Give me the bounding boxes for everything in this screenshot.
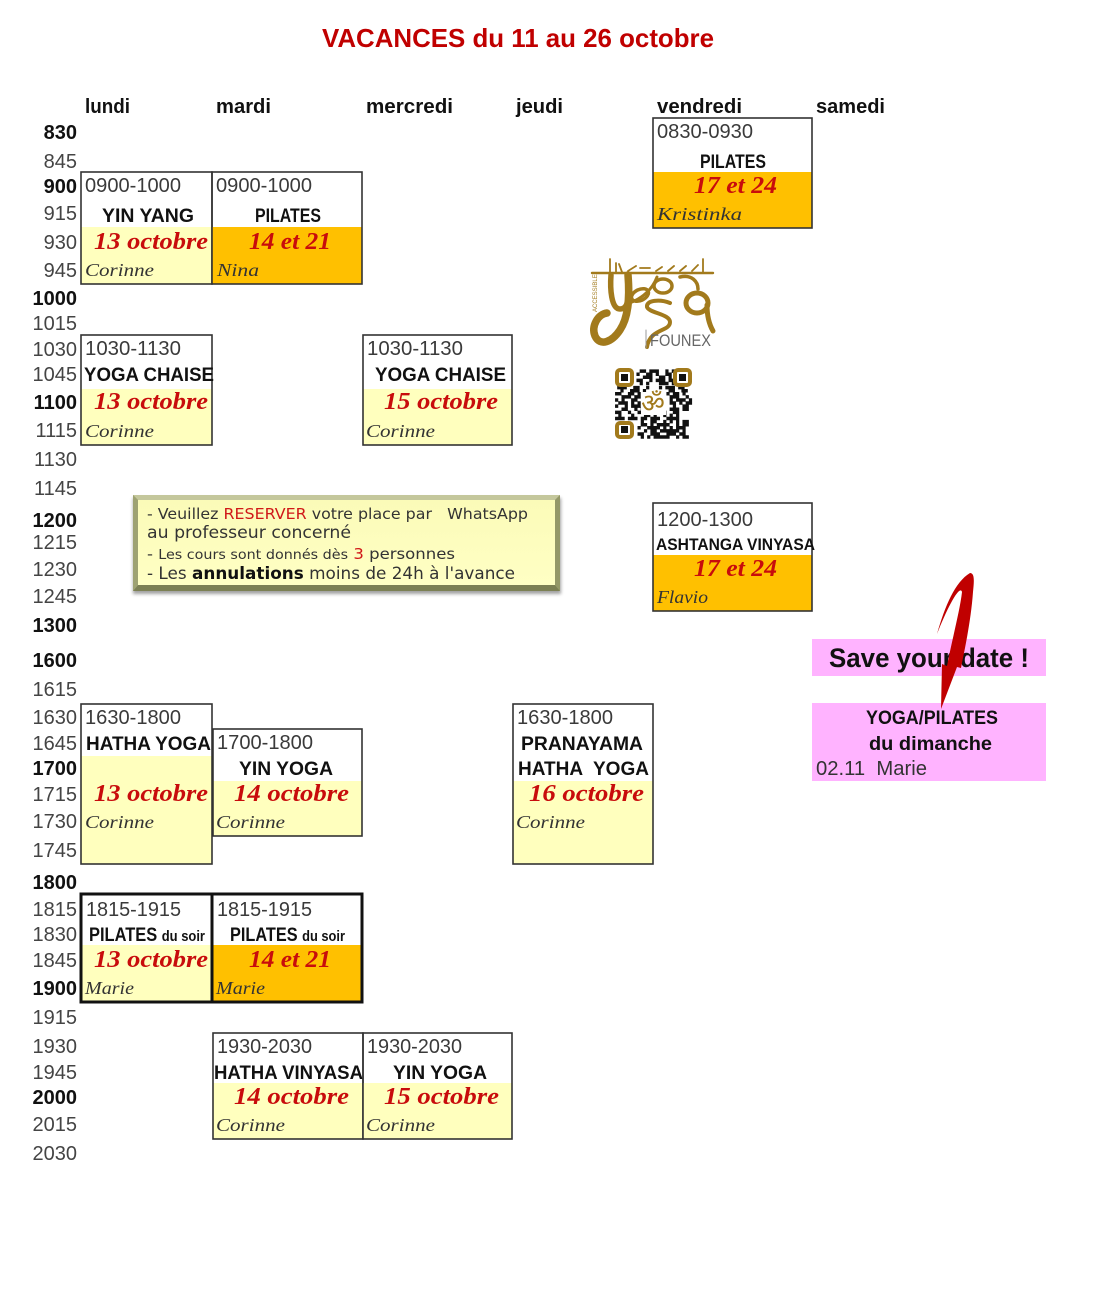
time axis: 845 bbox=[44, 151, 77, 173]
time axis: 1245 bbox=[32, 586, 77, 608]
class: lundi yoga chaise 1030: 1030-1130 bbox=[85, 338, 181, 360]
day headers bbox=[85, 96, 885, 118]
class: mardi pilates 0900: 14 et 21 bbox=[249, 229, 331, 255]
class: lundi pilates du soir 1815: 1815-1915 bbox=[86, 899, 181, 921]
day headers: jeudi bbox=[515, 96, 563, 118]
time axis: 1900 bbox=[32, 978, 77, 1000]
panel: yoga pilates du dimanche bbox=[812, 703, 1046, 781]
class: mardi hatha vinyasa 1930: HATHA VINYASA bbox=[214, 1063, 363, 1084]
time axis: 1015 bbox=[32, 313, 77, 335]
time axis: 1800 bbox=[32, 872, 77, 894]
class: lundi pilates du soir 1815: 13 octobre bbox=[94, 947, 208, 973]
class: mardi hatha vinyasa 1930 bbox=[213, 1033, 363, 1139]
class: vendredi pilates 0830: 0830-0930 bbox=[657, 121, 753, 143]
time axis: 1615 bbox=[32, 679, 77, 701]
time axis: 1630 bbox=[32, 707, 77, 729]
title: VACANCES du 11 au 26 octobre bbox=[322, 23, 714, 53]
time axis: 1145 bbox=[34, 478, 77, 500]
icon: QR code: ॐ bbox=[641, 388, 665, 418]
time axis: 1745 bbox=[32, 840, 77, 862]
callout: reservation notice: au professeur concerné bbox=[147, 523, 351, 543]
class: vendredi pilates 0830: 17 et 24 bbox=[694, 173, 777, 199]
time axis: 1600 bbox=[32, 650, 77, 672]
class: lundi yoga chaise 1030: 13 octobre bbox=[94, 389, 208, 415]
time axis: 1300 bbox=[32, 615, 77, 637]
class: mardi hatha vinyasa 1930: 1930-2030 bbox=[217, 1036, 312, 1058]
class: lundi pilates du soir 1815: Marie bbox=[84, 978, 134, 998]
class: mardi pilates 0900 bbox=[212, 172, 362, 284]
panel: save your date: Save your date ! bbox=[829, 643, 1029, 673]
callout: reservation notice: - Les annulations moins de 24h à l'avance bbox=[147, 564, 515, 583]
class: mardi pilates 0900: 0900-1000 bbox=[216, 175, 312, 197]
class: mardi yin yoga 1700: Corinne bbox=[216, 812, 285, 832]
time axis: 1830 bbox=[32, 924, 77, 946]
class: mardi pilates du soir 1815: PILATES du soir bbox=[230, 925, 345, 946]
time axis: 1815 bbox=[32, 899, 77, 921]
class: vendredi ashtanga vinyasa 1200 bbox=[653, 503, 815, 611]
class: vendredi ashtanga vinyasa 1200: Flavio bbox=[656, 587, 708, 607]
class: lundi yoga chaise 1030: YOGA CHAISE bbox=[84, 365, 214, 386]
class: vendredi pilates 0830: Kristinka bbox=[656, 204, 742, 224]
class: lundi yin yang 0900: YIN YANG bbox=[102, 206, 194, 227]
class: vendredi ashtanga vinyasa 1200: 17 et 24 bbox=[694, 556, 777, 582]
class: lundi yoga chaise 1030 bbox=[81, 335, 214, 445]
class: mardi hatha vinyasa 1930: Corinne bbox=[216, 1115, 285, 1135]
time axis: 2030 bbox=[32, 1143, 77, 1165]
class: mercredi yin yoga 1930: Corinne bbox=[366, 1115, 435, 1135]
time axis: 1645 bbox=[32, 733, 77, 755]
class: vendredi pilates 0830 bbox=[653, 118, 812, 228]
panel: yoga pilates du dimanche: YOGA/PILATES bbox=[866, 708, 998, 729]
day headers: mercredi bbox=[366, 96, 453, 118]
class: jeudi pranayama hatha yoga 1630: 16 octobre bbox=[529, 781, 644, 807]
day headers: lundi bbox=[85, 96, 130, 118]
class: lundi hatha yoga 1630: 1630-1800 bbox=[85, 707, 181, 729]
class: mercredi yoga chaise 1030: YOGA CHAISE bbox=[375, 365, 506, 386]
time axis: 1200 bbox=[32, 510, 77, 532]
time axis: 1030 bbox=[32, 339, 77, 361]
logo: yoga founex bbox=[592, 259, 713, 350]
class: lundi pilates du soir 1815: PILATES du soir bbox=[89, 925, 205, 946]
icon: QR code bbox=[615, 370, 692, 437]
callout: reservation notice bbox=[133, 495, 561, 594]
time axis: 1045 bbox=[32, 364, 77, 386]
time axis: 1845 bbox=[32, 950, 77, 972]
class: lundi yin yang 0900: Corinne bbox=[85, 260, 154, 280]
class: mardi pilates 0900: PILATES bbox=[255, 206, 321, 227]
time axis: 930 bbox=[44, 232, 77, 254]
class: mardi pilates du soir 1815: 1815-1915 bbox=[217, 899, 312, 921]
time axis: 1115 bbox=[35, 420, 77, 442]
class: jeudi pranayama hatha yoga 1630: 1630-1800 bbox=[517, 707, 613, 729]
class: vendredi pilates 0830: PILATES bbox=[700, 152, 766, 173]
class: mardi yin yoga 1700: 14 octobre bbox=[234, 781, 349, 807]
class: lundi yin yang 0900: 0900-1000 bbox=[85, 175, 181, 197]
time axis: 900 bbox=[44, 176, 77, 198]
day headers: vendredi bbox=[657, 96, 742, 118]
time axis: 1930 bbox=[32, 1036, 77, 1058]
arrow: red curved bbox=[937, 573, 974, 709]
class: jeudi pranayama hatha yoga 1630: Corinne bbox=[516, 812, 585, 832]
class: vendredi ashtanga vinyasa 1200: ASHTANGA VINYASA bbox=[656, 535, 815, 554]
class: mardi pilates du soir 1815: 14 et 21 bbox=[249, 947, 331, 973]
class: mercredi yin yoga 1930: YIN YOGA bbox=[393, 1063, 487, 1084]
class: jeudi pranayama hatha yoga 1630: PRANAYAMA bbox=[521, 734, 643, 755]
class: jeudi pranayama hatha yoga 1630: HATHA YOGA bbox=[518, 759, 649, 780]
class: mardi pilates 0900: Nina bbox=[216, 260, 259, 280]
panel: yoga pilates du dimanche: 02.11 Marie bbox=[816, 758, 927, 780]
time axis: 945 bbox=[44, 260, 77, 282]
time axis: 1715 bbox=[32, 784, 77, 806]
time axis: 1215 bbox=[32, 532, 77, 554]
callout: reservation notice: - Les cours sont donnés dès 3 personnes bbox=[147, 545, 455, 563]
day headers: samedi bbox=[816, 96, 885, 118]
panel: yoga pilates du dimanche: du dimanche bbox=[869, 734, 992, 755]
time axis: 915 bbox=[44, 203, 77, 225]
class: mercredi yin yoga 1930: 1930-2030 bbox=[367, 1036, 462, 1058]
time axis: 1730 bbox=[32, 811, 77, 833]
class: lundi hatha yoga 1630: Corinne bbox=[85, 812, 154, 832]
time axis: 1000 bbox=[32, 288, 77, 310]
time axis: 1130 bbox=[34, 449, 77, 471]
class: mercredi yin yoga 1930 bbox=[363, 1033, 512, 1139]
class: mardi yin yoga 1700: YIN YOGA bbox=[239, 759, 333, 780]
time axis: 1945 bbox=[32, 1062, 77, 1084]
class: lundi yin yang 0900: 13 octobre bbox=[94, 229, 208, 255]
class: mardi yin yoga 1700: 1700-1800 bbox=[217, 732, 313, 754]
time axis: 830 bbox=[44, 122, 77, 144]
logo: yoga founex: ACCESSIBLE bbox=[593, 274, 599, 312]
time axis: 1100 bbox=[34, 392, 77, 414]
class: lundi yoga chaise 1030: Corinne bbox=[85, 421, 154, 441]
class: mardi pilates du soir 1815: Marie bbox=[215, 978, 265, 998]
class: mardi yin yoga 1700 bbox=[213, 729, 362, 836]
time axis: 2000 bbox=[32, 1087, 77, 1109]
time axis: 1700 bbox=[32, 758, 77, 780]
class: lundi hatha yoga 1630: HATHA YOGA bbox=[86, 734, 211, 755]
logo: yoga founex: FOUNEX bbox=[650, 331, 711, 350]
class: vendredi ashtanga vinyasa 1200: 1200-1300 bbox=[657, 509, 753, 531]
callout: reservation notice: - Veuillez RESERVER votre place par WhatsApp bbox=[147, 505, 528, 523]
class: mercredi yoga chaise 1030: 15 octobre bbox=[384, 389, 498, 415]
class: lundi yin yang 0900 bbox=[81, 172, 212, 284]
class: mardi pilates du soir 1815 bbox=[212, 894, 362, 1002]
time axis: 2015 bbox=[32, 1114, 77, 1136]
time axis: 1230 bbox=[32, 559, 77, 581]
class: lundi pilates du soir 1815 bbox=[81, 894, 212, 1002]
time axis bbox=[32, 122, 77, 1165]
class: lundi hatha yoga 1630 bbox=[81, 704, 212, 864]
time axis: 1915 bbox=[32, 1007, 77, 1029]
class: lundi hatha yoga 1630: 13 octobre bbox=[94, 781, 208, 807]
class: mercredi yoga chaise 1030: 1030-1130 bbox=[367, 338, 463, 360]
class: mercredi yoga chaise 1030 bbox=[363, 335, 512, 445]
class: mercredi yin yoga 1930: 15 octobre bbox=[384, 1084, 499, 1110]
class: mardi hatha vinyasa 1930: 14 octobre bbox=[234, 1084, 349, 1110]
class: jeudi pranayama hatha yoga 1630 bbox=[513, 704, 653, 864]
day headers: mardi bbox=[216, 96, 271, 118]
class: mercredi yoga chaise 1030: Corinne bbox=[366, 421, 435, 441]
